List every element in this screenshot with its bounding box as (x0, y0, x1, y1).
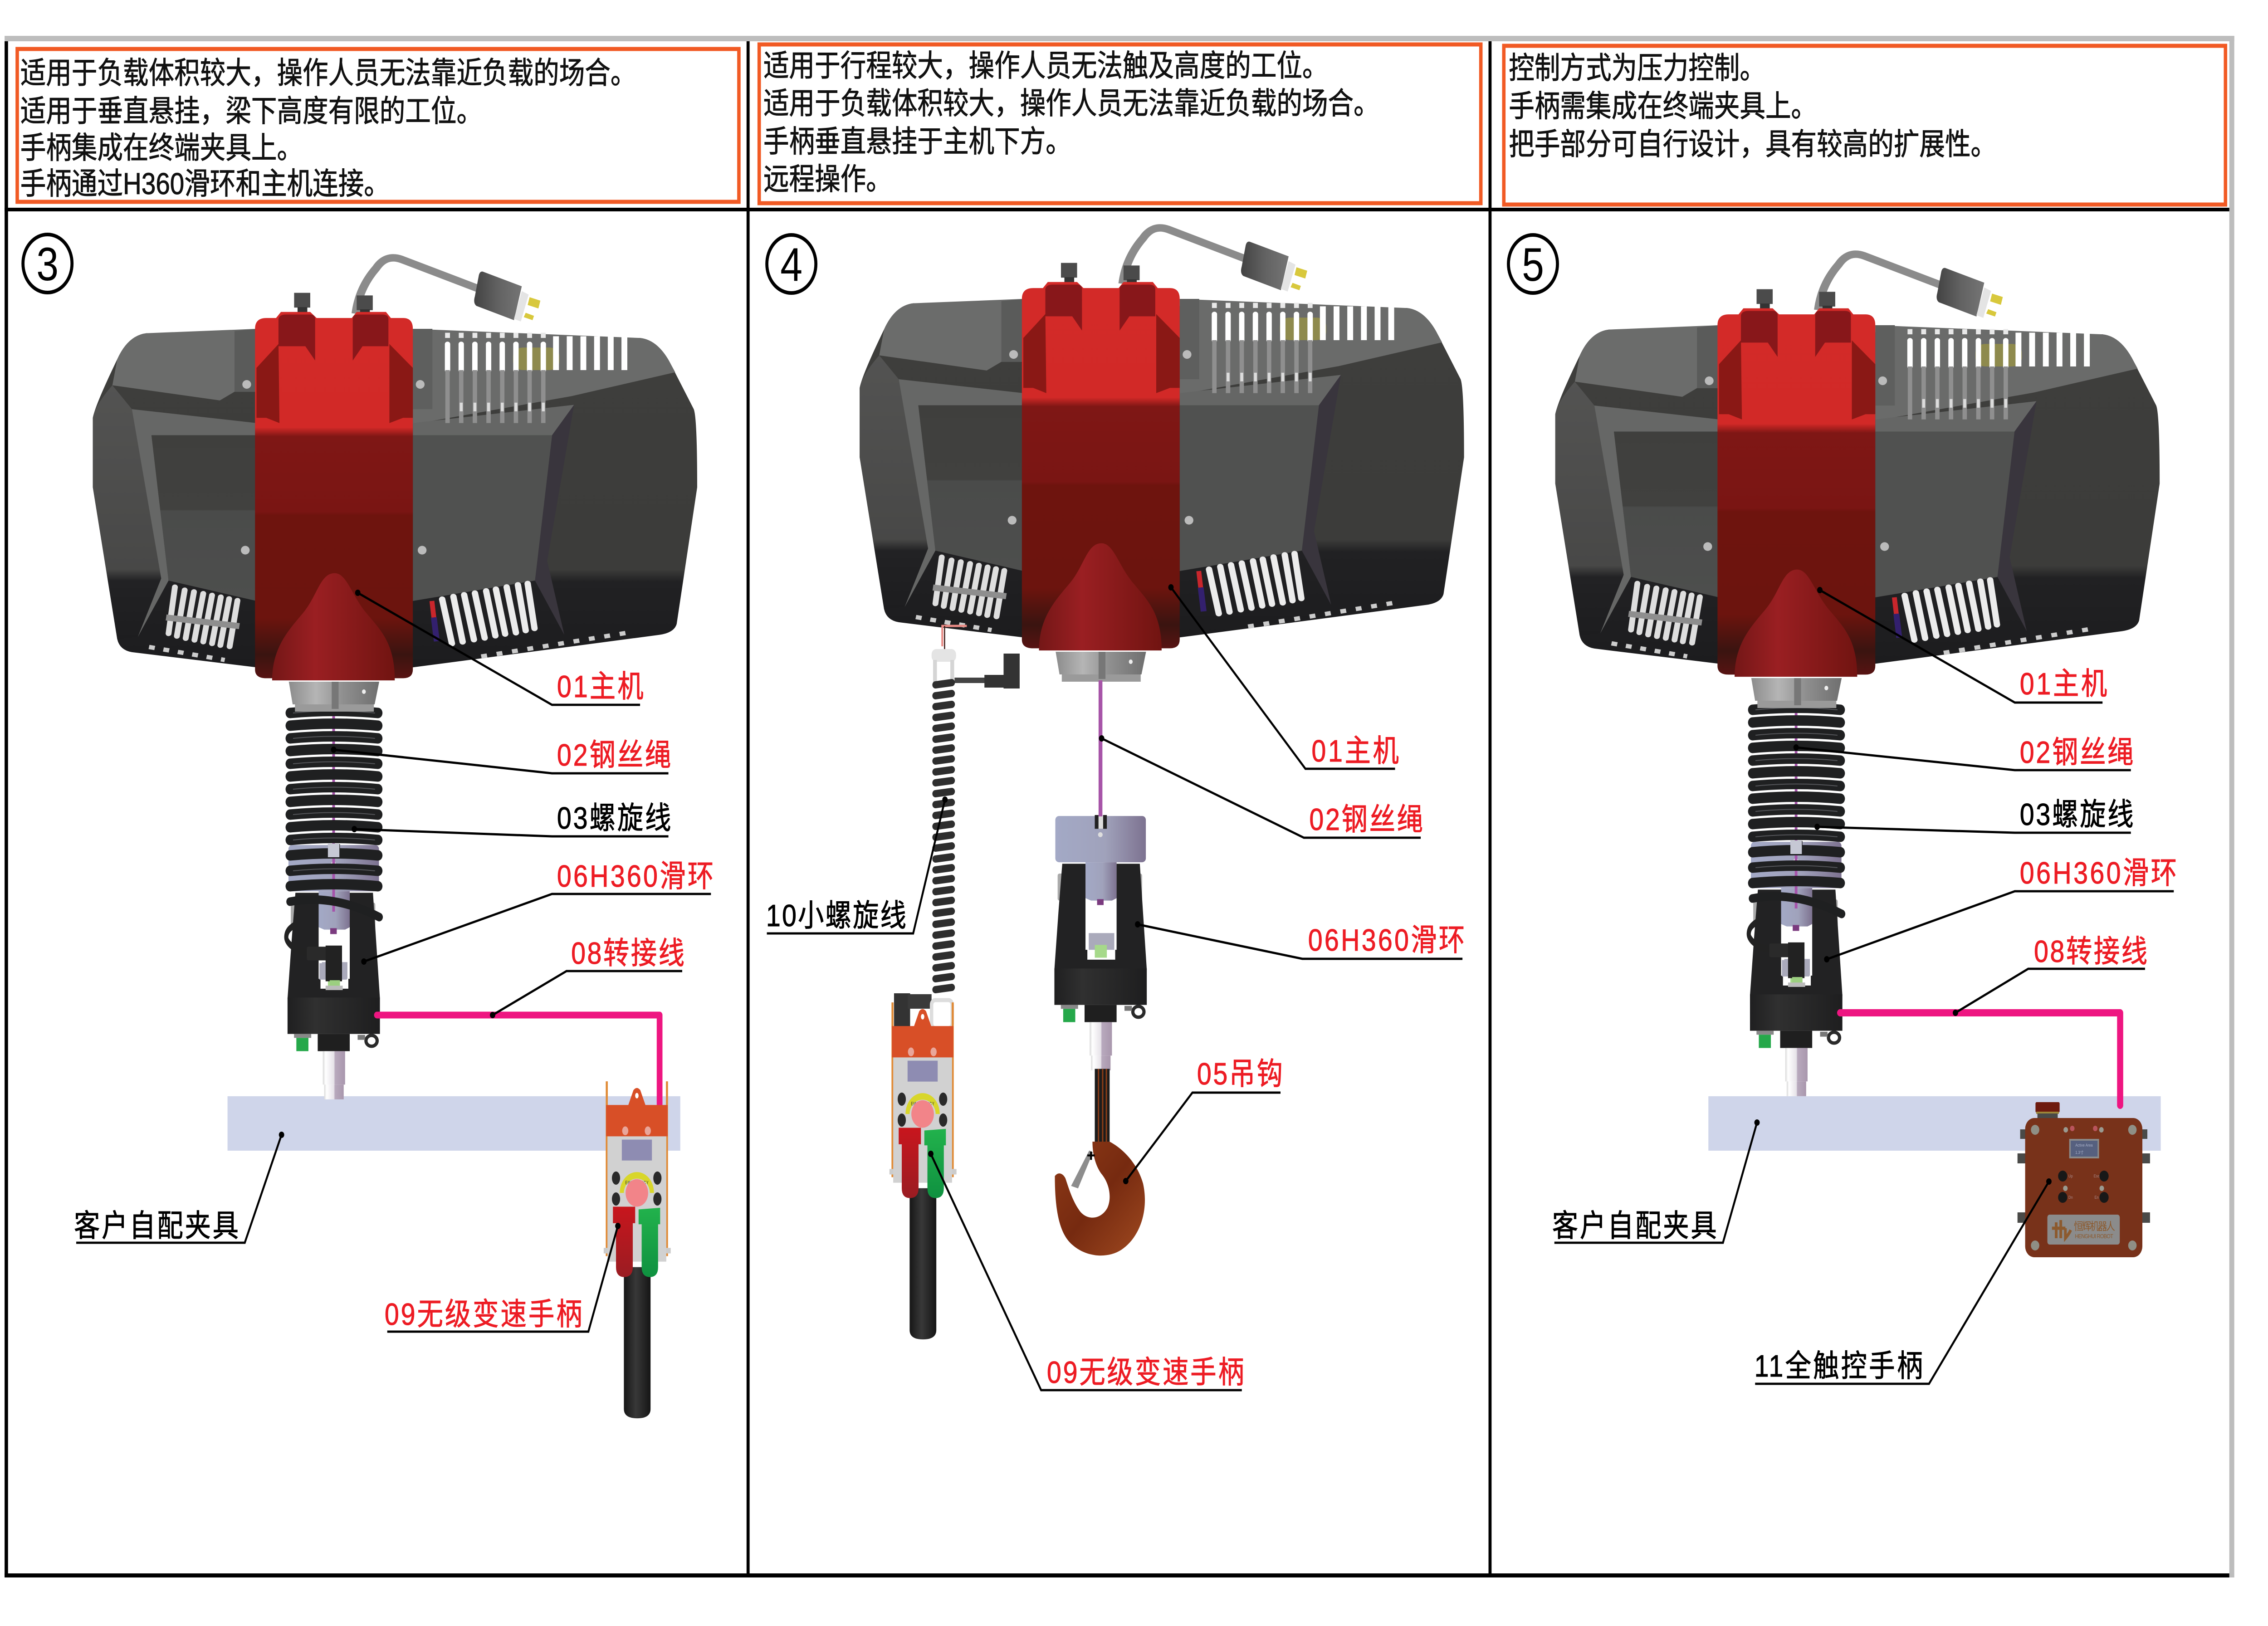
callout: 03 spiral cable, panel 5: 03螺旋线 (2020, 797, 2134, 832)
callout: 01 host, panel 4: 01主机 (1311, 734, 1399, 768)
callout: 09 handle, panel 4 (928, 1151, 1244, 1390)
inner connector: panel 3 (286, 923, 347, 990)
host unit: panel 5 (1555, 254, 2160, 708)
callout: 11 touch handle, panel 5 (1755, 1178, 2052, 1384)
callout: 06 slip ring, panel 3: 06H360滑环 (557, 859, 714, 894)
touch control handle: panel 5: 恒辉机器人 (2074, 1220, 2115, 1232)
callout: 08 transfer cable, panel 5: 08转接线 (2034, 934, 2147, 969)
number badge 5: 5 (1522, 239, 1544, 291)
touch control handle: panel 5: Up (2068, 1173, 2073, 1178)
touch control handle: panel 5: Esc (2094, 1173, 2099, 1178)
callout: 02 wire rope, panel 5: 02钢丝绳 (2020, 735, 2134, 770)
callout: 08 transfer cable, panel 3: 08转接线 (571, 936, 684, 971)
callout: 02 wire rope, panel 4 (1099, 735, 1423, 838)
callout: customer clamp, panel 3 (74, 1132, 284, 1243)
touch control handle: panel 5: Active Area (2075, 1143, 2093, 1147)
inner connector: panel 5 (1749, 920, 1809, 987)
callout: 06 slip ring, panel 4: 06H360滑环 (1308, 923, 1465, 957)
callout: 01 host, panel 4 (1168, 584, 1399, 769)
panel: configuration 4 description: 手柄垂直悬挂于主机下方。 (763, 125, 1071, 159)
callout: 03 spiral cable, panel 3: 03螺旋线 (557, 801, 671, 835)
panel: configuration 3 description: 适用于垂直悬挂，梁下高度有限的工位。 (20, 95, 482, 128)
callout: 10 small spiral cable, panel 4 (766, 796, 948, 933)
callout: 02 wire rope, panel 3: 02钢丝绳 (557, 738, 671, 772)
callout: 08 transfer cable, panel 3 (490, 936, 684, 1018)
panel: configuration 5 description: 把手部分可自行设计，具有较高的扩展性。 (1509, 128, 1996, 161)
callout: 08 transfer cable, panel 5 (1953, 934, 2147, 1016)
touch control handle: panel 5: 1.3寸 (2075, 1150, 2083, 1155)
pendant handle: panel 3 (604, 1081, 671, 1418)
host unit: panel 3 (93, 258, 697, 712)
number badge 4 (767, 235, 816, 293)
number badge 3 (23, 234, 72, 293)
panel: configuration 3 description (17, 49, 739, 202)
small spiral cable: panel 4 (932, 626, 1020, 990)
panel: configuration 4 description: 远程操作。 (763, 163, 892, 196)
slip ring: panel 3 (288, 844, 380, 1099)
wire rope: panel 4 (1099, 680, 1102, 816)
clamp bar: panel 3 (228, 1096, 680, 1151)
panel: configuration 3 description: 手柄集成在终端夹具上。 (20, 132, 303, 165)
callout: 03 spiral cable, panel 3 (352, 801, 671, 836)
callout: customer clamp, panel 5: 客户自配夹具 (1552, 1209, 1717, 1243)
callout: 05 hook, panel 4: 05吊钩 (1197, 1057, 1283, 1091)
callout: 03 spiral cable, panel 5 (1814, 797, 2134, 833)
panel: configuration 5 description: 控制方式为压力控制。 (1509, 52, 1765, 85)
panel: configuration 3 description: 手柄通过H360滑环和主机连接。 (20, 167, 390, 201)
number badge 3: 3 (36, 238, 59, 291)
callout: customer clamp, panel 5 (1552, 1119, 1760, 1243)
spiral cable: panel 3 (290, 710, 379, 917)
spiral cable: panel 5 (1752, 707, 1842, 914)
callout: 01 host, panel 5: 01主机 (2020, 667, 2107, 701)
callout: 02 wire rope, panel 3 (331, 738, 671, 773)
callout: 09 handle, panel 4: 09无级变速手柄 (1047, 1355, 1244, 1390)
callout: 01 host, panel 3: 01主机 (557, 669, 644, 704)
panel: configuration 3 description: 适用于负载体积较大，操作人员无法靠近负载的场合。 (20, 57, 636, 90)
touch control handle: panel 5 (2018, 1102, 2150, 1257)
pendant handle: panel 4 (890, 993, 957, 1339)
callout: 06 slip ring, panel 4 (1135, 921, 1465, 959)
callout: customer clamp, panel 3: 客户自配夹具 (74, 1209, 239, 1243)
touch control handle: panel 5: HENGHUI ROBOT (2075, 1233, 2113, 1240)
panel: configuration 4 description: 适用于行程较大，操作人员无法触及高度的工位。 (763, 49, 1328, 83)
slip ring: panel 5 (1750, 841, 1843, 1096)
panel: configuration 4 description (759, 44, 1481, 203)
callout: 01 host, panel 3 (355, 590, 644, 705)
callout: 11 touch handle, panel 5: 11全触控手柄 (1755, 1349, 1923, 1383)
panel: configuration 5 description: 手柄需集成在终端夹具上。 (1509, 90, 1817, 123)
callout: 02 wire rope, panel 4: 02钢丝绳 (1309, 802, 1423, 837)
slip ring: panel 4 (1054, 815, 1147, 1070)
callout: 09 handle, panel 3 (385, 1223, 621, 1332)
panel: configuration 5 description (1504, 46, 2225, 205)
touch control handle: panel 5: En (2094, 1195, 2099, 1200)
number badge 5 (1508, 235, 1558, 293)
number badge 4: 4 (780, 239, 802, 291)
transfer cable: panel 5 (1840, 1013, 2120, 1105)
callout: 10 small spiral cable, panel 4: 10小螺旋线 (766, 898, 906, 933)
callout: 06 slip ring, panel 3 (361, 859, 714, 965)
clamp bar: panel 5 (1708, 1096, 2161, 1151)
panel: configuration 4 description: 适用于负载体积较大，操作人员无法靠近负载的场合。 (763, 87, 1379, 121)
touch control handle: panel 5: Dn (2068, 1195, 2073, 1200)
callout: 06 slip ring, panel 5 (1824, 856, 2177, 962)
transfer cable: panel 3 (377, 1015, 660, 1107)
callout: 06 slip ring, panel 5: 06H360滑环 (2020, 856, 2177, 890)
callout: 01 host, panel 5 (1817, 587, 2107, 703)
callout: 02 wire rope, panel 5 (1794, 735, 2134, 770)
hook: panel 4 (1055, 1069, 1145, 1255)
callout: 09 handle, panel 3: 09无级变速手柄 (385, 1297, 582, 1332)
host unit: panel 4 (860, 228, 1464, 682)
callout: 05 hook, panel 4 (1123, 1057, 1283, 1184)
